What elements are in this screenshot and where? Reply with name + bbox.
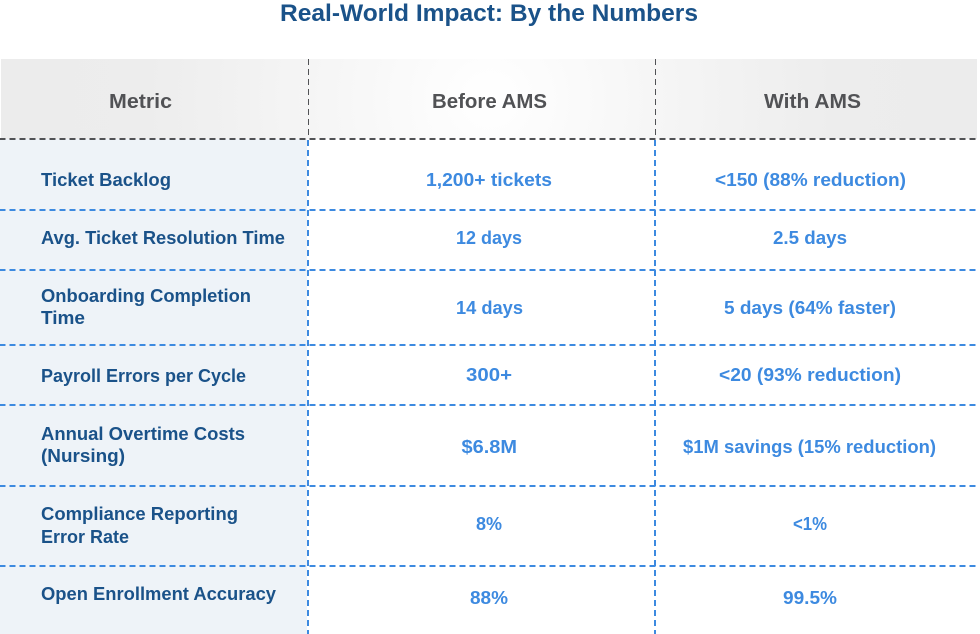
header row: Metric bbox=[109, 91, 172, 113]
row: resolution time bbox=[41, 228, 847, 248]
header row: With AMS bbox=[764, 91, 861, 113]
row: ticket backlog: 1,200+ tickets bbox=[426, 170, 552, 190]
row: payroll errors: 300+ bbox=[466, 365, 512, 385]
row: open enrollment bbox=[41, 584, 837, 608]
row: overtime costs: $1M savings (15% reduction) bbox=[683, 437, 936, 457]
row: overtime costs: $6.8M bbox=[462, 437, 517, 457]
row: onboarding: 14 days bbox=[456, 298, 523, 318]
row: open enrollment: 88% bbox=[470, 588, 508, 608]
row: onboarding bbox=[41, 286, 896, 328]
row: resolution time: 2.5 days bbox=[773, 228, 847, 248]
title: Real-World Impact: By the Numbers bbox=[280, 0, 698, 27]
row: compliance: Compliance Reporting bbox=[41, 504, 238, 524]
header row: Before AMS bbox=[432, 91, 547, 113]
row: open enrollment: Open Enrollment Accuracy bbox=[41, 584, 276, 604]
grid lines bbox=[0, 139, 976, 634]
row: ticket backlog: <150 (88% reduction) bbox=[715, 170, 906, 190]
row: open enrollment: 99.5% bbox=[783, 588, 837, 608]
row: resolution time: Avg. Ticket Resolution Time bbox=[41, 228, 285, 248]
row: onboarding: Onboarding Completion bbox=[41, 286, 251, 306]
row: compliance: <1% bbox=[793, 514, 827, 534]
row: payroll errors: Payroll Errors per Cycle bbox=[41, 366, 246, 386]
row: overtime costs: Annual Overtime Costs bbox=[41, 424, 245, 444]
row: compliance bbox=[41, 504, 827, 547]
row: compliance: Error Rate bbox=[41, 527, 129, 547]
row: overtime costs: (Nursing) bbox=[41, 446, 125, 466]
row: compliance: 8% bbox=[476, 514, 502, 534]
row: onboarding: Time bbox=[41, 308, 85, 328]
row: ticket backlog bbox=[41, 170, 906, 190]
row: payroll errors bbox=[41, 365, 901, 386]
row: resolution time: 12 days bbox=[456, 228, 522, 248]
header row bbox=[1, 59, 977, 139]
row: overtime costs bbox=[41, 424, 936, 466]
row: payroll errors: <20 (93% reduction) bbox=[719, 365, 901, 385]
row: ticket backlog: Ticket Backlog bbox=[41, 170, 171, 190]
metric column background bbox=[0, 139, 307, 634]
row: onboarding: 5 days (64% faster) bbox=[724, 298, 896, 318]
